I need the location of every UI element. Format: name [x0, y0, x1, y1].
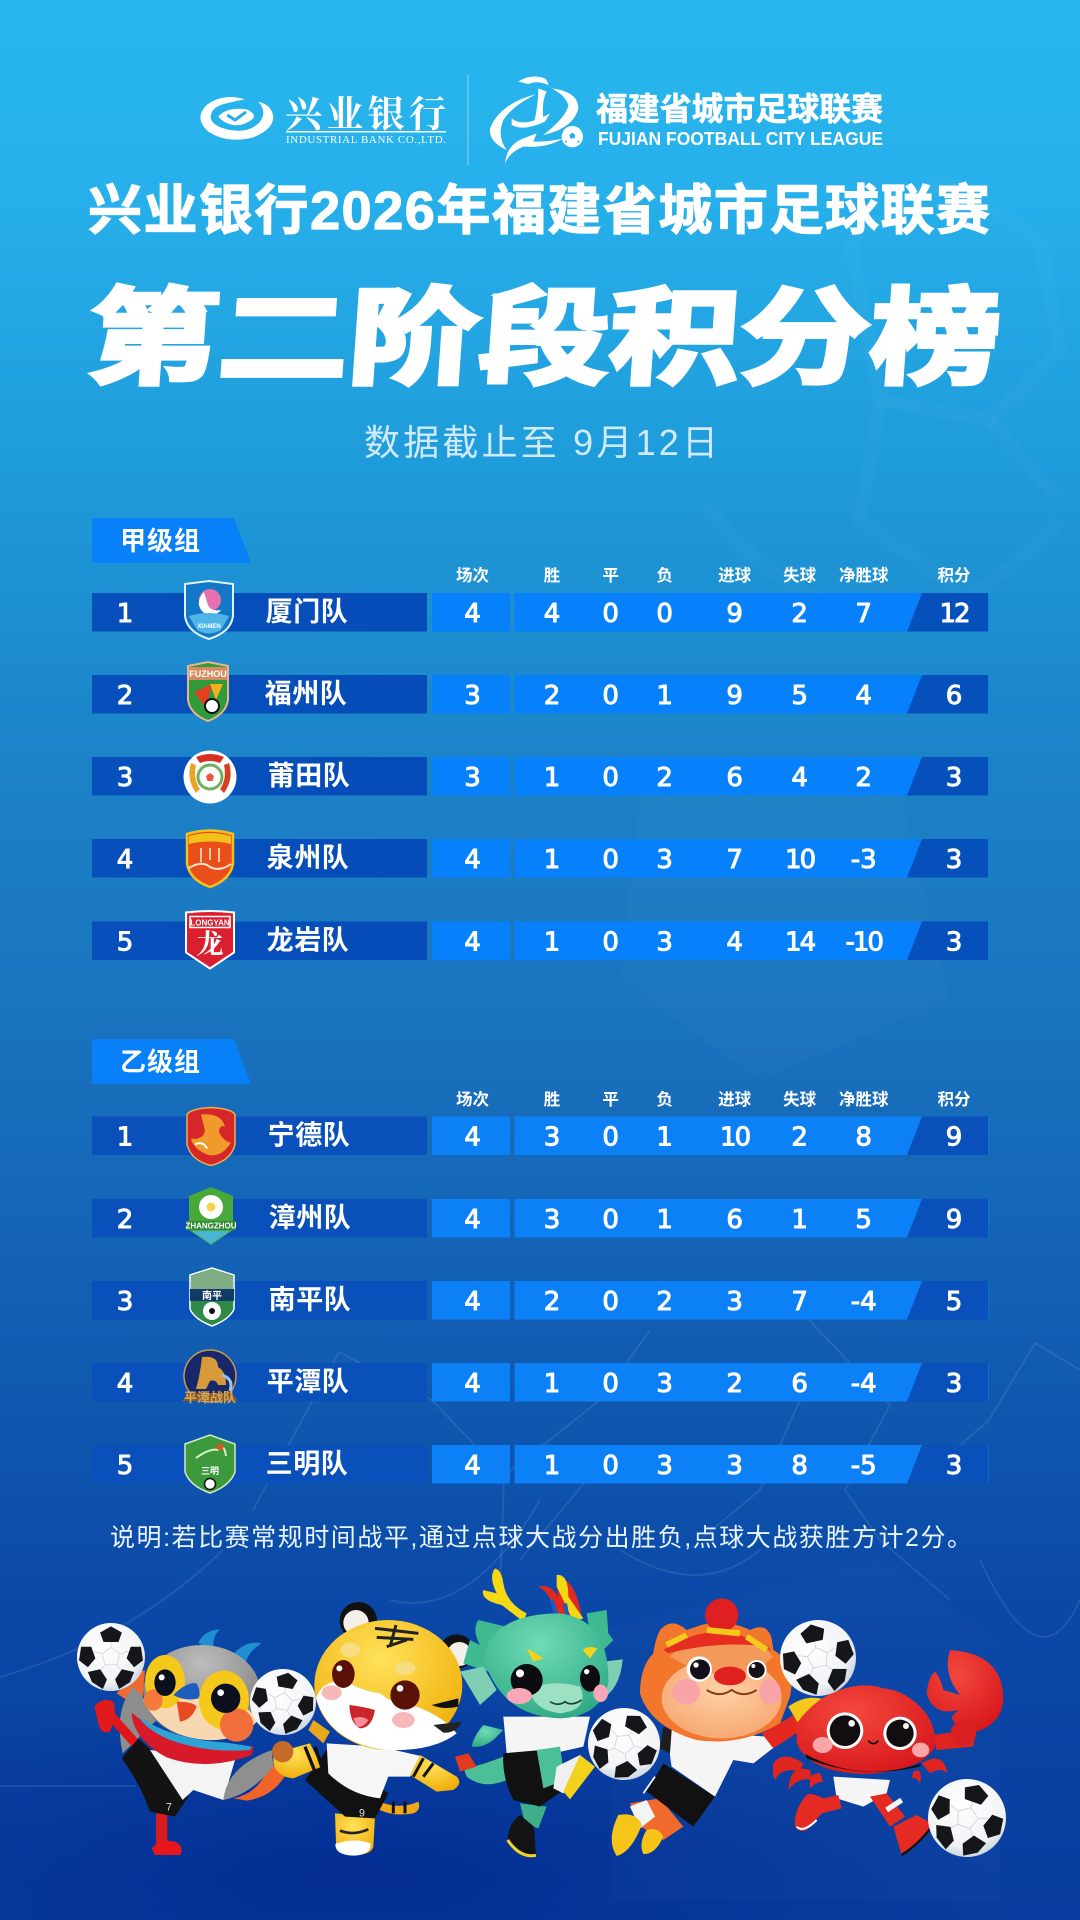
row: Ningde: 2 [791, 1122, 808, 1152]
row: Xiamen: 7 [855, 599, 872, 629]
row: Fuzhou: 2 [544, 681, 560, 711]
group A table [92, 518, 988, 968]
row: Ningde: 宁德队 [268, 1120, 350, 1150]
badge: Fuzhou [188, 662, 228, 721]
row: Ningde: 8 [855, 1122, 872, 1152]
row: Putian: 6 [726, 763, 743, 793]
mascot: lion [612, 1598, 825, 1856]
row: Ningde: 0 [602, 1122, 619, 1152]
row: Pingtan: 4 [117, 1369, 133, 1399]
group tag: B [92, 1039, 251, 1084]
row: Longyan: 5 [117, 928, 133, 958]
row: Longyan: 14 [785, 928, 816, 958]
row: Pingtan: 3 [656, 1369, 673, 1399]
row: Fuzhou: 3 [464, 681, 481, 711]
football 3 [575, 1695, 673, 1793]
row: Longyan: 0 [602, 928, 619, 958]
column headers B: 场次 [456, 1090, 490, 1109]
row: Sanming: 5 [117, 1451, 133, 1481]
row: Quanzhou: 1 [544, 845, 560, 875]
row: Putian: 3 [117, 763, 133, 793]
row: Xiamen: 2 [791, 599, 808, 629]
league english name: FUJIAN FOOTBALL CITY LEAGUE [598, 129, 883, 149]
column headers A [456, 566, 971, 585]
column headers A: 场次 [456, 566, 490, 585]
column headers A: 失球 [783, 566, 817, 585]
badge: Longyan: LONGYAN [190, 918, 230, 928]
row: Xiamen: 9 [726, 599, 743, 629]
row: Quanzhou: 0 [602, 845, 619, 875]
group B table [92, 1039, 988, 1493]
badge: Zhangzhou: ZHANGZHOU [185, 1222, 237, 1230]
row: Quanzhou [92, 830, 988, 887]
row: Sanming: -5 [851, 1451, 877, 1481]
icon: league emblem [490, 76, 583, 163]
badge: Nanping: 南平 [202, 1289, 222, 1302]
badge: Zhangzhou [185, 1187, 237, 1245]
group tag: A: 甲级组 [120, 526, 201, 556]
row: Pingtan: 3 [946, 1369, 962, 1399]
row: Xiamen: 4 [544, 599, 560, 629]
column headers B: 负 [656, 1090, 673, 1109]
faint football watermark [700, 180, 1060, 615]
row: Quanzhou: 4 [464, 845, 481, 875]
badge: Nanping [190, 1268, 234, 1326]
row: Fuzhou: 9 [726, 681, 743, 711]
row: Longyan: 4 [726, 928, 743, 958]
row: Zhangzhou: 5 [855, 1205, 872, 1235]
column headers B: 失球 [783, 1090, 817, 1109]
row: Ningde: 9 [946, 1122, 962, 1152]
badge: Pingtan [182, 1350, 238, 1405]
column headers A: 净胜球 [839, 566, 889, 585]
row: Zhangzhou: 9 [946, 1205, 962, 1235]
column headers B: 胜 [544, 1090, 560, 1109]
column headers B: 净胜球 [839, 1090, 889, 1109]
row: Longyan: -10 [845, 928, 882, 958]
column headers A: 进球 [718, 566, 752, 585]
column headers A: 胜 [544, 566, 560, 585]
row: Ningde: 4 [464, 1122, 481, 1152]
row: Putian: 2 [855, 763, 872, 793]
column headers A: 积分 [938, 566, 971, 585]
row: Pingtan: 1 [544, 1369, 560, 1399]
row: Xiamen: 0 [602, 599, 619, 629]
badge: Longyan: 龙 [196, 922, 224, 962]
row: Longyan: 3 [946, 928, 962, 958]
row: Sanming: 0 [602, 1451, 619, 1481]
row: Xiamen: 4 [464, 599, 481, 629]
row: Xiamen: 12 [939, 599, 969, 629]
title: second stage standings: 第二阶段积分榜 [84, 281, 1005, 398]
badge: Ningde [187, 1108, 235, 1166]
bank english name: INDUSTRIAL BANK CO.,LTD. [286, 134, 446, 146]
row: Pingtan: 平潭队 [267, 1367, 349, 1397]
row: Longyan: 3 [656, 928, 673, 958]
row: Quanzhou: 10 [785, 845, 815, 875]
row: Pingtan: 0 [602, 1369, 619, 1399]
row: Longyan [92, 911, 988, 968]
row: Ningde: 1 [117, 1122, 133, 1152]
mascot: bird [94, 1629, 287, 1855]
row: Zhangzhou: 3 [544, 1205, 560, 1235]
mascot: tiger: 9 [359, 1808, 365, 1820]
row: Zhangzhou: 1 [791, 1205, 808, 1235]
badge: Putian [184, 750, 236, 804]
row: Longyan: 龙岩队 [267, 926, 349, 956]
row: Quanzhou: 3 [656, 845, 673, 875]
title: league name: 兴业银行2026年福建省城市足球联赛 [88, 181, 990, 241]
row: Putian: 1 [544, 763, 560, 793]
football 4 [773, 1613, 863, 1703]
group tag: B: 乙级组 [120, 1047, 201, 1077]
row: Zhangzhou [92, 1187, 988, 1245]
row: Nanping [92, 1268, 988, 1326]
row: Nanping: 0 [602, 1287, 619, 1317]
group tag: A [92, 518, 251, 563]
row: Quanzhou: 3 [946, 845, 962, 875]
row: Quanzhou: 4 [117, 845, 133, 875]
row: Longyan: 1 [544, 928, 560, 958]
row: Zhangzhou: 4 [464, 1205, 481, 1235]
row: Ningde: 3 [544, 1122, 560, 1152]
badge: Longyan [186, 911, 234, 968]
row: Nanping: 3 [117, 1287, 133, 1317]
note: 说明:若比赛常规时间战平,通过点球大战分出胜负,点球大战获胜方计2分。 [110, 1524, 972, 1552]
badge: Sanming [185, 1435, 235, 1493]
row: Fuzhou: 6 [946, 681, 962, 711]
row: Fuzhou: 1 [656, 681, 673, 711]
row: Putian: 4 [791, 763, 808, 793]
row: Sanming: 三明队 [266, 1449, 348, 1479]
row: Pingtan: -4 [851, 1369, 877, 1399]
row: Nanping: 5 [946, 1287, 962, 1317]
row: Quanzhou: -3 [851, 845, 877, 875]
row: Fuzhou: 4 [855, 681, 872, 711]
row: Nanping: -4 [851, 1287, 877, 1317]
row: Sanming: 8 [791, 1451, 808, 1481]
row: Sanming: 3 [946, 1451, 962, 1481]
football 2 [245, 1664, 321, 1740]
column headers B [456, 1090, 971, 1109]
row: Sanming: 1 [544, 1451, 560, 1481]
row: Ningde: 1 [656, 1122, 673, 1152]
row: Zhangzhou: 2 [117, 1205, 133, 1235]
row: Nanping: 4 [464, 1287, 481, 1317]
row: Sanming: 3 [726, 1451, 743, 1481]
row: Pingtan: 2 [726, 1369, 743, 1399]
column headers A: 负 [656, 566, 673, 585]
mascots [77, 1568, 1017, 1868]
row: Xiamen [92, 581, 988, 639]
row: Longyan: 4 [464, 928, 481, 958]
row: Sanming: 4 [464, 1451, 481, 1481]
mascot: crab [773, 1650, 1003, 1855]
icon: bank swirl [200, 97, 273, 140]
row: Sanming [92, 1435, 988, 1493]
row: Fuzhou: 福州队 [265, 679, 347, 709]
row: Pingtan: 4 [464, 1369, 481, 1399]
mascot: dragon [455, 1568, 623, 1856]
badge: Xiamen: XIAMEN [197, 624, 221, 630]
badge: Xiamen [185, 581, 233, 639]
row: Putian: 3 [464, 763, 481, 793]
row: Putian: 0 [602, 763, 619, 793]
row: Fuzhou: 0 [602, 681, 619, 711]
row: Nanping: 7 [791, 1287, 808, 1317]
row: Nanping: 南平队 [269, 1285, 351, 1315]
row: Nanping: 3 [726, 1287, 743, 1317]
row: Pingtan: 6 [791, 1369, 808, 1399]
logo: Industrial Bank [200, 84, 446, 146]
bank name: 兴业银行 [285, 84, 446, 138]
badge: Quanzhou [187, 830, 233, 887]
row: Xiamen: 0 [656, 599, 673, 629]
row: Zhangzhou: 1 [656, 1205, 673, 1235]
league chinese name: 福建省城市足球联赛 [596, 91, 883, 127]
row: Sanming: 3 [656, 1451, 673, 1481]
row: Xiamen: 1 [117, 599, 133, 629]
mascot: bird: 7 [166, 1802, 172, 1814]
row: Nanping: 2 [656, 1287, 673, 1317]
mascot: tiger [272, 1602, 474, 1856]
column headers B: 进球 [718, 1090, 752, 1109]
row: Zhangzhou: 0 [602, 1205, 619, 1235]
row: Putian [92, 750, 988, 804]
column headers B: 平 [602, 1091, 619, 1109]
row: Quanzhou: 泉州队 [267, 843, 349, 873]
row: Xiamen: 厦门队 [266, 597, 348, 627]
football 1 [77, 1623, 145, 1691]
row: Putian: 3 [946, 763, 962, 793]
row: Fuzhou: 2 [117, 681, 133, 711]
row: Quanzhou: 7 [726, 845, 743, 875]
football 5 [917, 1768, 1017, 1868]
row: Zhangzhou: 6 [726, 1205, 743, 1235]
column headers A: 平 [602, 567, 619, 585]
row: Nanping: 2 [544, 1287, 560, 1317]
row: Putian: 莆田队 [268, 761, 350, 791]
row: Zhangzhou: 漳州队 [269, 1203, 351, 1233]
column headers B: 积分 [938, 1090, 971, 1109]
badge: Fuzhou: FUZHOU [189, 669, 227, 679]
badge: Sanming: 三明 [201, 1466, 219, 1476]
data date: 数据截止至 9月12日 [364, 422, 718, 463]
logo: Fujian Football City League [490, 76, 883, 163]
row: Putian: 2 [656, 763, 673, 793]
row: Ningde: 10 [720, 1122, 750, 1152]
badge: Pingtan: 平潭战队 [184, 1390, 236, 1405]
row: Pingtan [92, 1350, 988, 1405]
row: Fuzhou [92, 662, 988, 721]
row: Ningde [92, 1108, 988, 1166]
row: Fuzhou: 5 [791, 681, 808, 711]
